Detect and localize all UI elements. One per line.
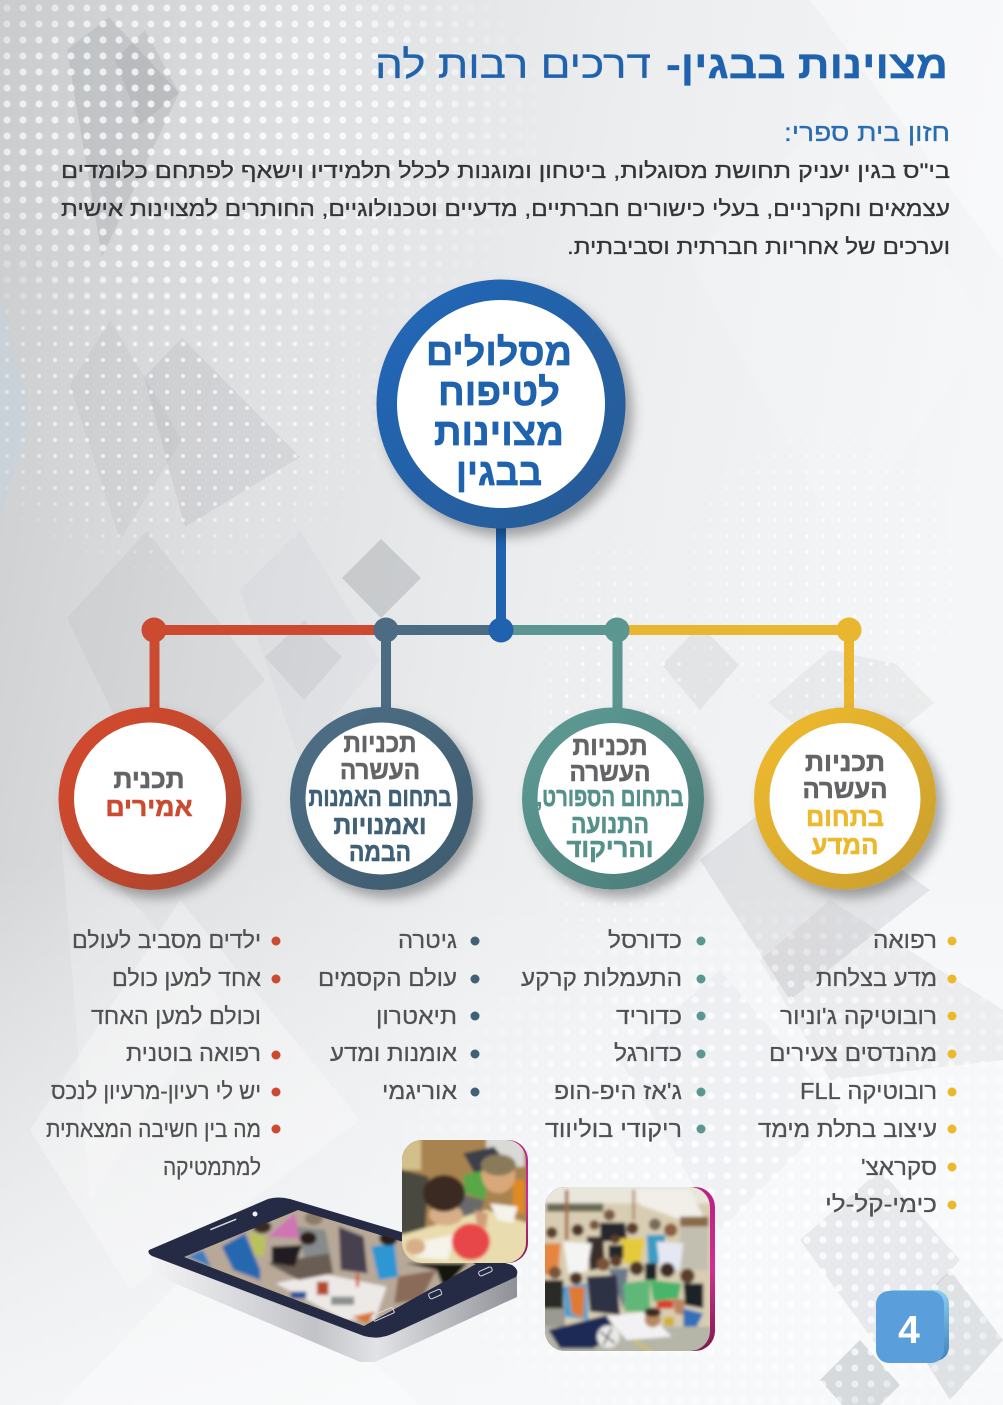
list: science [758, 927, 956, 1217]
list: science: כימי-קל-לי [825, 1191, 937, 1217]
subheading: school vision: חזון בית ספרי: [784, 119, 950, 147]
circle: arts program: ואמנויות [334, 810, 426, 840]
hub circle: לטיפוח [438, 372, 560, 414]
list: arts [318, 927, 480, 1104]
list: science: מהנדסים צעירים [769, 1040, 937, 1066]
list: science: רובוטיקה ג'וניור [780, 1003, 937, 1029]
vision paragraph: וערכים של אחריות חברתית וסביבתית. [567, 235, 950, 259]
list: science: עיצוב בתלת מימד [758, 1116, 937, 1142]
list: Amirim [46, 927, 280, 1180]
list: sports: ג'אז היפ-הופ [554, 1078, 682, 1104]
list: sports: ריקודי בוליווד [545, 1116, 682, 1142]
circle: arts program: בתחום האמנות [308, 782, 452, 812]
list: sports: כדורסל [608, 927, 682, 953]
list: science: סקראצ' [861, 1154, 937, 1180]
page number badge: 4 [898, 1309, 920, 1352]
list: arts: אומנות ומדע [330, 1040, 458, 1066]
list: arts: אוריגמי [382, 1078, 458, 1104]
circle: arts program: תכניות [344, 728, 416, 758]
page number badge [876, 1290, 949, 1363]
circle: sports program: התנועה [571, 809, 649, 839]
circle: sports program [522, 708, 704, 890]
circle: sports program: בתחום הספורט, [536, 782, 684, 812]
list: Amirim: יש לי רעיון-מרעיון לנכס [51, 1078, 261, 1104]
circle: science program: העשרה [802, 774, 888, 804]
photo: boys with balloon [402, 1140, 528, 1263]
circle: science program: בתחום [806, 802, 884, 832]
vision paragraph: בי"ס בגין יעניק תחושת מסוגלות, ביטחון ומוגנות לכלל תלמידיו וישאף לפתחם כלומדים [61, 159, 950, 183]
list: Amirim: למתמטיקה [163, 1154, 261, 1180]
list: sports: התעמלות קרקע [521, 965, 682, 991]
circle: sports program: העשרה [570, 757, 650, 787]
list: science: רובוטיקה FLL [800, 1078, 937, 1104]
title: דרכים רבות לה [375, 44, 651, 87]
circle: arts program [290, 707, 473, 890]
list: Amirim: אחד למען כולם [112, 965, 262, 991]
vision paragraph: עצמאים וחקרניים, בעלי כישורים חברתיים, מדעיים וטכנולוגיים, החותרים למצוינות אישית [61, 197, 950, 221]
circle: arts program: העשרה [340, 755, 420, 785]
list: science: רפואה [873, 927, 937, 953]
list: sports [521, 927, 706, 1142]
list: Amirim: ילדים מסביב לעולם [72, 927, 261, 953]
list: arts: גיטרה [398, 927, 457, 953]
title: מצוינות בבגין- [666, 44, 948, 87]
list: arts: עולם הקסמים [318, 965, 457, 991]
photo: group of boys [545, 1187, 715, 1351]
hub circle: מצוינות [434, 412, 564, 454]
vision paragraph [61, 159, 950, 259]
list: sports: כדוריד [616, 1003, 682, 1029]
connector tree [142, 520, 862, 715]
circle: science program: המדע [812, 830, 878, 860]
phone with photo [148, 1197, 517, 1362]
list: Amirim: מה בין חשיבה המצאתית [46, 1116, 261, 1142]
circle: sports program: והריקוד [566, 833, 654, 863]
list: arts: תיאטרון [376, 1003, 457, 1029]
hub circle [376, 280, 626, 528]
circle: sports program: תכניות [572, 731, 648, 761]
circle: arts program: הבמה [349, 837, 411, 867]
list: science: מדע בצלחת [816, 965, 937, 991]
list: sports: כדורגל [614, 1040, 682, 1066]
circle: science program: תכניות [805, 747, 885, 777]
circle: Amirim program: אמירים [106, 792, 193, 822]
title [375, 44, 948, 87]
circle: Amirim program [58, 707, 242, 890]
hub circle: בבגין [456, 452, 542, 494]
circle: Amirim program: תכנית [114, 764, 184, 794]
list: Amirim: וכולם למען האחד [91, 1003, 261, 1029]
hub circle: מסלולים [426, 332, 572, 374]
circle: science program [754, 708, 936, 890]
list: Amirim: רפואה בוטנית [126, 1040, 261, 1066]
